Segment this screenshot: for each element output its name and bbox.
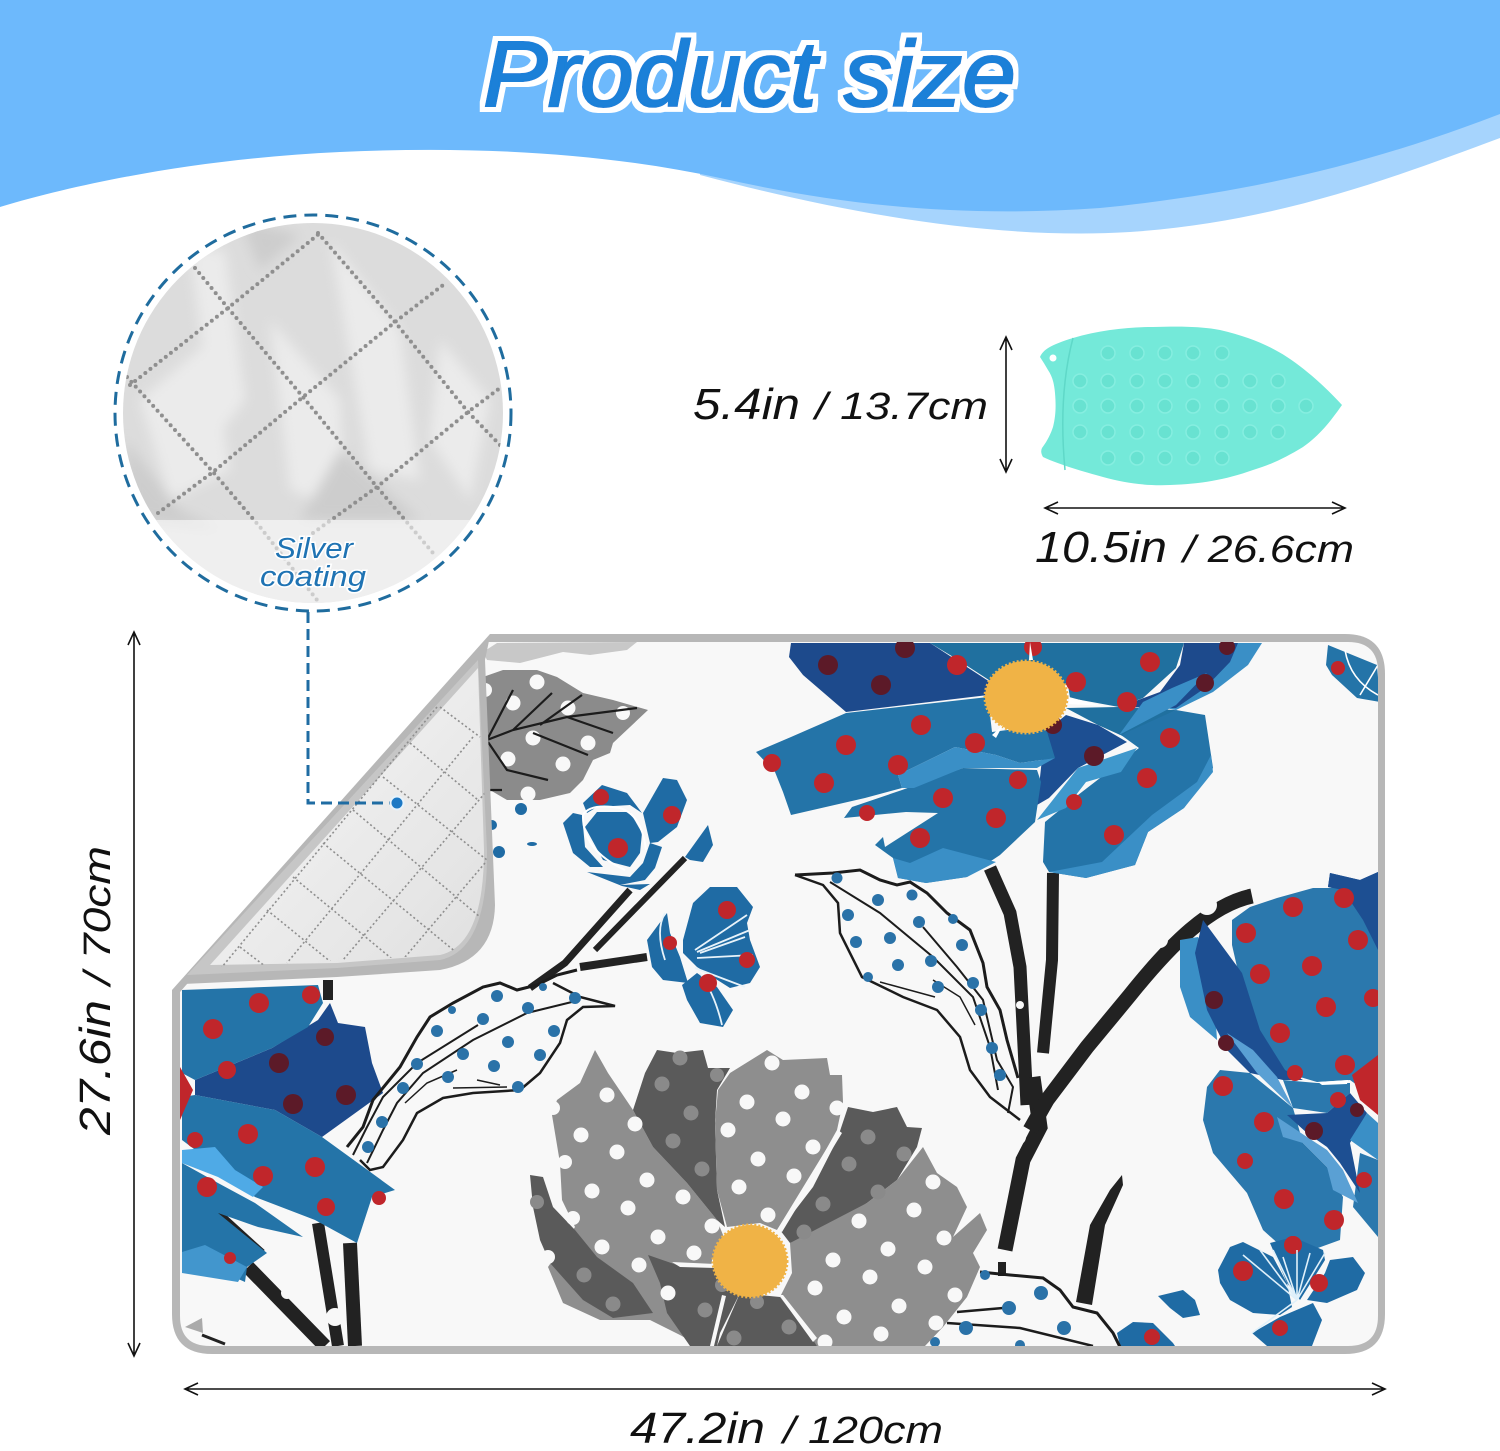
print: small blue buds [563,778,1365,1346]
print: top blue flower [756,638,1262,883]
quilted fabric swatch [120,220,510,610]
fold: silver underside [172,636,495,992]
print: black stems [202,858,1252,1346]
arrow: iron rest width [1045,502,1345,514]
label: iron rest height: 5.4in [693,380,800,429]
arrow: mat height [128,632,140,1356]
label: silver coating [260,533,366,593]
print: outlined dotted leaf bottom [930,1270,1120,1350]
label: iron rest width: / 26.6cm [1179,529,1354,571]
header blue banner [0,0,1500,211]
print: stem notches [281,895,1217,1326]
flower B [647,887,760,1027]
mat floral print [170,638,1385,1350]
header light wave [700,100,1500,233]
label: silver coating: Silver [275,533,354,565]
arrow: iron rest height [1000,337,1012,472]
label: mat height: / 70cm [77,846,119,989]
flower C [1218,1236,1365,1346]
bud A [563,778,687,890]
print: top-right flower fragment [1326,645,1380,702]
mat border [172,634,1385,1354]
label: iron rest width: 10.5in [1035,523,1167,572]
iron rest bumps [1073,346,1313,465]
print: top gray blob [483,642,637,663]
label: mat width: / 120cm [779,1410,943,1451]
label: mat width [630,1404,943,1451]
connector: dashed leader to silver side [308,612,404,810]
small leaf petal [1158,1290,1200,1318]
label: mat height: 27.6in [71,1000,120,1136]
arrow: mat width [185,1383,1385,1395]
fold: quilted stitching [217,707,487,973]
dashed ring [115,215,511,611]
lower bud [1117,1322,1175,1346]
label: mat height [71,846,120,1136]
icon: teal silicone iron rest [1040,327,1342,485]
label: iron rest width [1035,523,1354,572]
print: right blue flower [1180,872,1382,1257]
panel: silver coating detail circle [115,215,511,611]
print: gray flower [530,1050,987,1350]
print: corner fold mark [185,1318,203,1333]
label: silver coating: coating [260,561,366,593]
bud tip [685,825,713,862]
print: tapered stem [1076,1175,1123,1305]
title: Product size [483,22,1016,126]
print: scattered blue dots [487,803,537,858]
label: iron rest height [693,380,988,429]
print: lower-left blue flower [180,985,395,1282]
label: iron rest height: / 13.7cm [811,386,988,428]
print: outlined dotted leaf centre [795,870,1020,1120]
panel: ironing mat [170,634,1385,1354]
print: outlined dotted leaf lower left [347,970,615,1170]
print: gray leaf [478,670,648,802]
gray flower dots [541,1056,962,1350]
